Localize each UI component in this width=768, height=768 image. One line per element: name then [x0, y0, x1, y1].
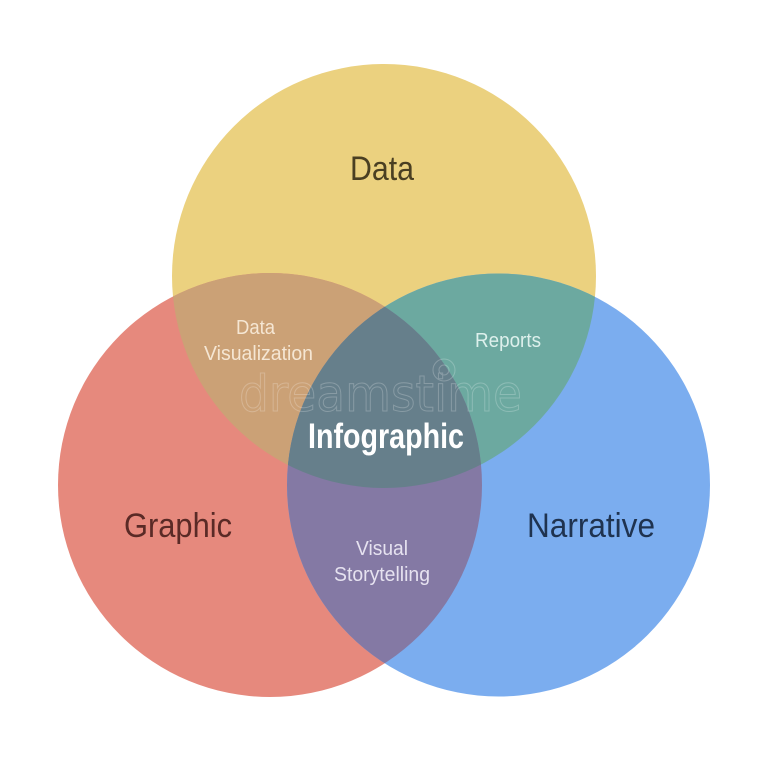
label: Visual Storytelling [334, 538, 430, 586]
label: Graphic: Graphic [124, 507, 232, 545]
overlap: Data and Graphic [173, 273, 384, 465]
label: Data: Data [350, 150, 414, 188]
label: Data Visualization [204, 317, 313, 365]
label: Visual Storytelling: Storytelling [334, 564, 430, 586]
label: Data Visualization: Visualization [204, 343, 313, 365]
label: Infographic: Infographic [308, 417, 464, 456]
label: Visual Storytelling: Visual [356, 538, 408, 560]
circle: Graphic [58, 273, 482, 697]
watermark: dreamstime [239, 365, 522, 423]
circle: Narrative [287, 274, 710, 696]
venn diagram [58, 64, 710, 697]
overlap: Graphic and Narrative [287, 306, 482, 664]
label: Narrative: Narrative [527, 507, 655, 545]
overlap: center of all three [288, 306, 481, 488]
label: Data Visualization: Data [236, 317, 276, 339]
circle: Data [172, 64, 596, 488]
label: Reports: Reports [475, 330, 541, 352]
overlap: Data and Narrative [288, 274, 595, 464]
